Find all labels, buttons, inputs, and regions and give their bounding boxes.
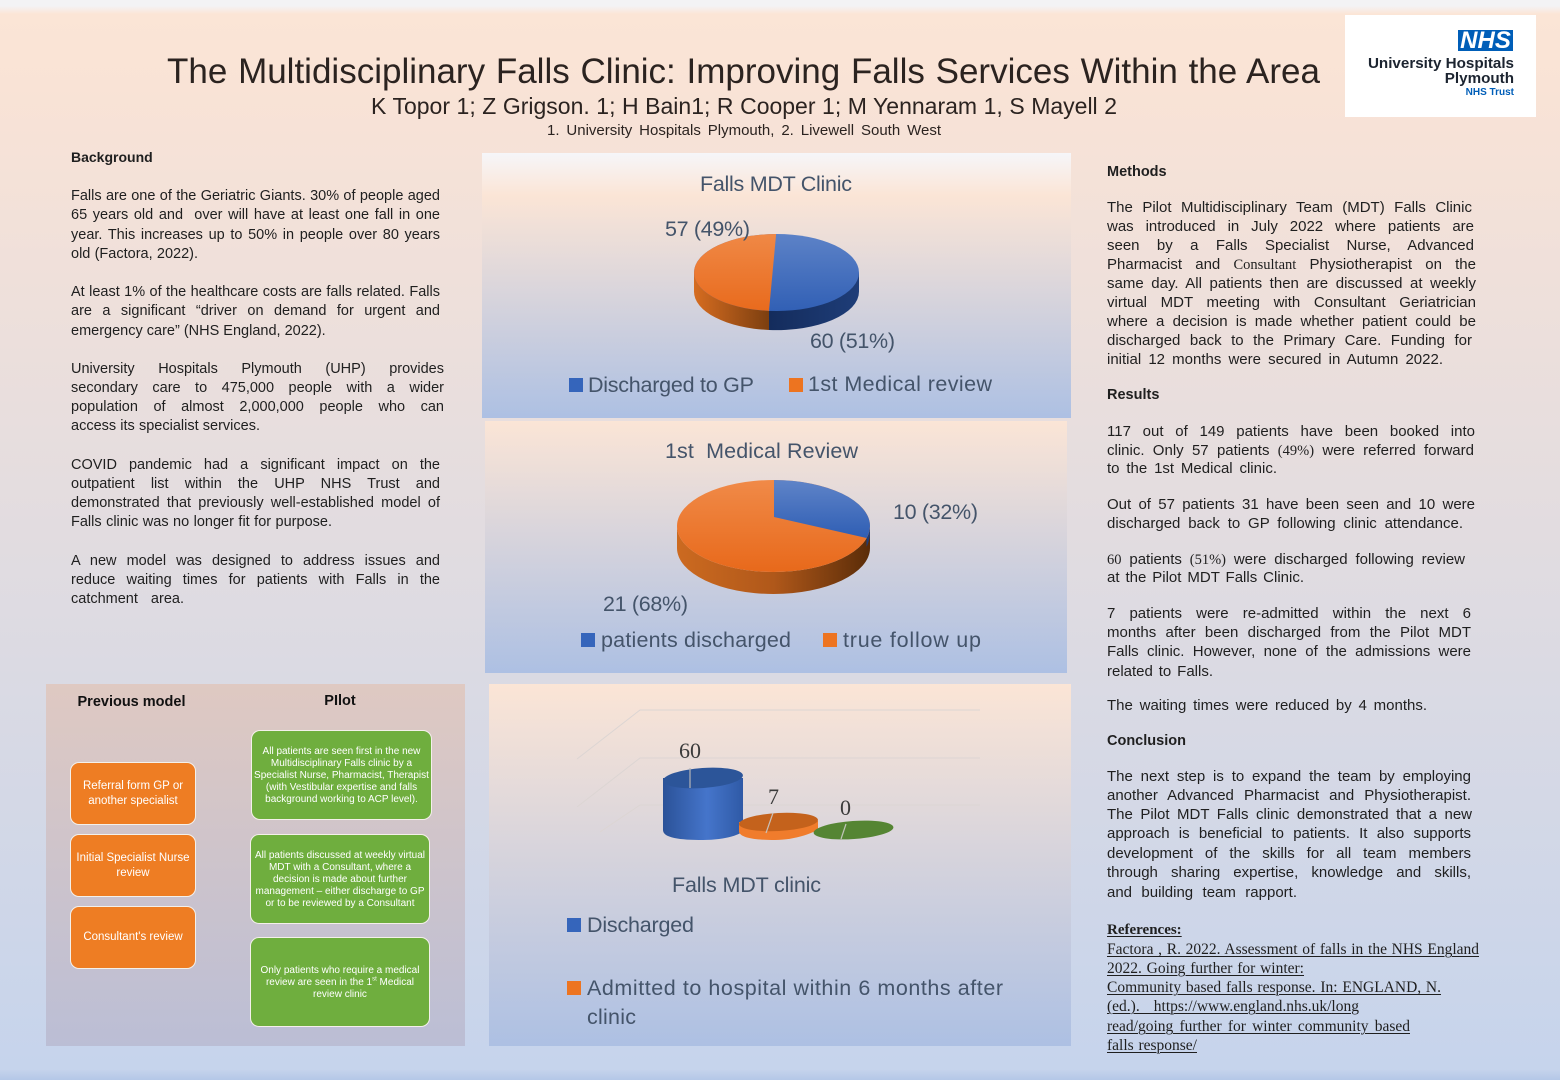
text block: background: year. This increases up to 50% in people over 80 years [71,227,440,243]
text block: background: outpatient list within the UHP NHS Trust and [71,476,440,492]
text block: background: are a significant “driver on demand for urgent and [71,303,440,319]
text block: methods, results, conclusion, references: was introduced in July 2022 where patients are [1107,218,1474,235]
text block: methods, results, conclusion, references: approach is beneficial to patients. It also supports [1107,825,1471,842]
legend: patients discharged [601,628,791,652]
text block: methods, results, conclusion, references: seen by a Falls Specialist Nurse, Advanced [1107,237,1474,254]
text block: methods, results, conclusion, references: through sharing expertise, knowledge and skills, [1107,864,1471,881]
text block: methods, results, conclusion, references: discharged back to GP following clinic attendance. [1107,515,1463,532]
text block: background: catchment area. [71,591,184,607]
panel: 1st medical review pie chart [485,421,1067,673]
text block: methods, results, conclusion, references: Pharmacist and Consultant Physiotherapist on the [1107,256,1476,273]
axis label: Falls MDT clinic [672,873,821,897]
text block: methods, results, conclusion, references: read/going further for winter community based [1107,1018,1410,1035]
text block: methods, results, conclusion, references: Out of 57 patients 31 have been seen and 10 were [1107,496,1475,513]
text block: methods, results, conclusion, references: where a decision is made whether patient could be [1107,313,1476,330]
pilot step: weekly MDT: All patients discussed at weekly virtual [255,850,425,861]
text block: background: 65 years old and over will have at least one fall in one [71,207,440,223]
text block: methods, results, conclusion, references: Falls clinic. However, none of the admissions were [1107,643,1471,660]
pie [677,480,870,594]
legend: Discharged to GP [588,373,754,397]
authors: K Topor 1; Z Grigson. 1; H Bain1; R Cooper 1; M Yennaram 1, S Mayell 2 [371,93,1117,119]
text block: methods, results, conclusion, references: The next step is to expand the team by employing [1107,768,1471,785]
title: The Multidisciplinary Falls Clinic: Improving Falls Services Within the Area [167,52,1320,91]
pilot step: first clinic: All patients are seen first in the new [263,746,420,757]
pilot step: medical review: Only patients who require a medical [260,965,419,976]
legend: clinic [587,1005,636,1029]
text block: methods, results, conclusion, references: virtual MDT meeting with Consultant Geriatrician [1107,294,1476,311]
pilot step: first clinic: (with Vestibular expertise and falls [266,782,417,793]
text block: background: COVID pandemic had a significant impact on the [71,457,440,473]
trust name: Plymouth [1445,70,1514,87]
bar: admitted for falls 0 [813,818,894,842]
pilot step: medical review [250,937,430,1027]
heading: conclusion: Conclusion [1107,733,1186,749]
text block: background: population of almost 2,000,000 people who can [71,399,444,415]
text block: methods, results, conclusion, references: discharged back to the Primary Care. Funding for [1107,332,1472,349]
heading: results: Results [1107,387,1159,403]
legend [581,628,981,652]
previous step: referral: Referral form GP or [83,780,183,792]
pie [690,230,865,330]
text block: background: University Hospitals Plymouth (UHP) provides [71,361,444,377]
pilot step: first clinic: background working to ACP level). [265,794,418,805]
pilot step: medical review: review are seen in the 1st Medical [266,977,414,988]
text block: methods, results, conclusion, references: 117 out of 149 patients have been booked into [1107,423,1475,440]
heading: background: Background [71,149,153,165]
chart title: 1st Medical Review [665,439,858,463]
text block: methods, results, conclusion, references: development of the skills for all team members [1107,845,1471,862]
legend [569,372,992,397]
previous step: referral: another specialist [88,794,178,806]
chart title: Falls MDT Clinic [700,172,852,196]
previous step: consultant review: Consultant's review [83,931,183,943]
affiliations: 1. University Hospitals Plymouth, 2. Livewell South West [547,122,941,139]
text block: methods, results, conclusion, references: clinic. Only 57 patients (49%) were referred forward [1107,442,1474,459]
text block: methods, results, conclusion, references: falls response/ [1107,1037,1197,1054]
text block: methods, results, conclusion, references: The waiting times were reduced by 4 months. [1107,697,1427,714]
text block: background: demonstrated that previously well-established model of [71,495,440,511]
data label: true follow up: 21 (68%) [603,592,688,616]
heading: pilot: PIlot [324,693,356,709]
previous step: referral [70,762,196,825]
text block: methods, results, conclusion, references: The Pilot MDT Falls clinic demonstrated that a new [1107,806,1472,823]
data label: 0: 0 [840,795,851,820]
pilot step: first clinic: Multidisciplinary Falls clinic by a [271,758,412,769]
text block: methods, results, conclusion, references: The Pilot Multidisciplinary Team (MDT) Falls Clinic [1107,199,1472,216]
text block: background: A new model was designed to address issues and [71,553,440,569]
heading: methods: Methods [1107,164,1167,180]
text block: background [71,149,444,607]
text block: methods, results, conclusion, references: months after been discharged from the Pilot MDT [1107,624,1471,641]
text block: methods, results, conclusion, references [1107,164,1479,1054]
previous step: nurse review [70,834,196,897]
previous step: nurse review: review [116,866,150,878]
pilot step: first clinic: Specialist Nurse, Pharmacist, Therapist [254,770,429,781]
bar: discharged 60 [662,765,744,840]
NHS lozenge: NHS [1460,27,1511,54]
text block: background: secondary care to 475,000 people with a wider [71,380,444,396]
panel: falls MDT clinic pie chart [482,153,1071,418]
text block: methods, results, conclusion, references: 7 patients were re-admitted within the next 6 [1107,605,1471,622]
legend: 1st Medical review [808,372,992,396]
pilot step: weekly MDT [250,834,430,924]
trust name [1368,55,1514,87]
pilot step: weekly MDT: MDT with a Consultant, where a [269,862,411,873]
data label: patients discharged: 10 (32%) [893,500,978,524]
text block: background: old (Factora, 2022). [71,246,198,262]
legend: Discharged [587,913,694,937]
trust name: University Hospitals [1368,55,1514,72]
pilot step: weekly MDT: decision is made about further [273,874,407,885]
text block: methods, results, conclusion, references: another Advanced Pharmacist and Physiotherapist. [1107,787,1471,804]
text block: background: Falls are one of the Geriatric Giants. 30% of people aged [71,188,440,204]
text block: methods, results, conclusion, references: initial 12 months were secured in Autumn 2022. [1107,351,1443,368]
logo: University Hospitals Plymouth NHS Trust [1345,15,1536,117]
data label: 7: 7 [768,784,779,809]
previous step: consultant review [70,906,196,969]
text block: background: At least 1% of the healthcare costs are falls related. Falls [71,284,440,300]
trust label: NHS Trust [1466,87,1514,98]
text block: background: access its specialist services. [71,418,260,434]
data label: 60: 60 [679,738,701,763]
text block: methods, results, conclusion, references: related to Falls. [1107,663,1213,680]
bar: admitted 7 [739,811,818,840]
previous step: nurse review: Initial Specialist Nurse [76,852,190,864]
references: References: [1107,922,1182,938]
text block: methods, results, conclusion, references: Community based falls response. In: ENGLAND, N. [1107,979,1441,996]
pilot step: weekly MDT: management – either discharge to GP [256,886,424,897]
pilot step: medical review: review clinic [313,989,367,1000]
text block: methods, results, conclusion, references: and building team rapport. [1107,884,1297,901]
text block: methods, results, conclusion, references: 60 patients (51%) were discharged following review [1107,551,1465,568]
text block: background: Falls clinic was no longer fit for purpose. [71,514,332,530]
pilot step: first clinic [251,730,432,820]
text block: methods, results, conclusion, references: to the 1st Medical clinic. [1107,460,1277,477]
heading: previous model: Previous model [78,694,185,710]
panel: falls MDT clinic 3D bar chart [489,684,1071,1046]
text block: background: emergency care” (NHS England, 2022). [71,323,326,339]
text block: methods, results, conclusion, references: same day. All patients then are discussed at weekly [1107,275,1476,292]
text block: methods, results, conclusion, references: Factora , R. 2022. Assessment of falls in the NHS England [1107,941,1479,958]
legend [567,913,1003,1029]
text block: methods, results, conclusion, references: (ed.). https://www.england.nhs.uk/long [1107,998,1359,1015]
panel: previous model versus pilot flow [46,684,465,1046]
text block: background: reduce waiting times for patients with Falls in the [71,572,440,588]
data label: discharged: 60 (51%) [810,329,895,353]
legend: Admitted to hospital within 6 months after [587,976,1003,1000]
text block: methods, results, conclusion, references: at the Pilot MDT Falls Clinic. [1107,569,1304,586]
pilot step: weekly MDT: or to be reviewed by a Consultant [266,898,414,909]
data label: 1st medical review: 57 (49%) [665,217,750,241]
legend: true follow up [843,628,981,652]
text block: methods, results, conclusion, references: 2022. Going further for winter: [1107,960,1304,977]
